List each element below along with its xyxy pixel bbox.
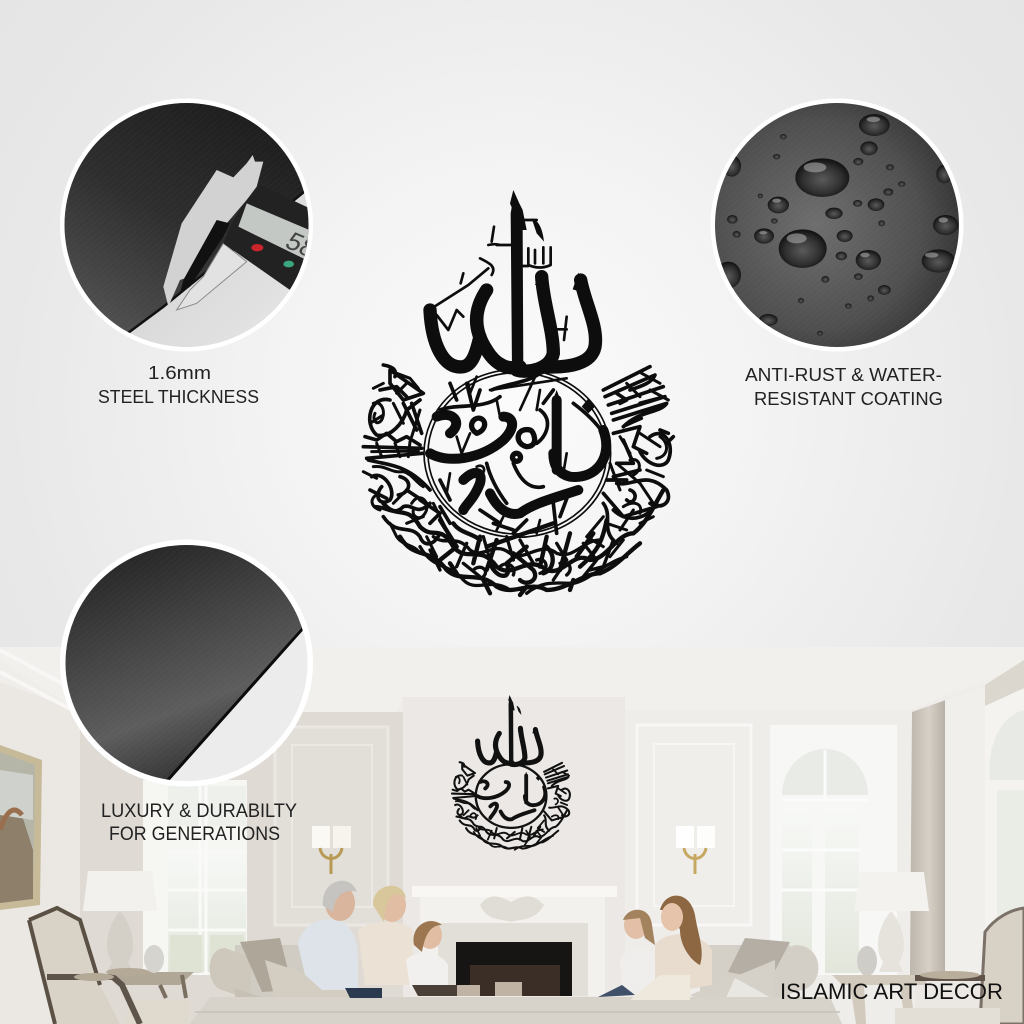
left window: [143, 780, 247, 975]
armchair left: [29, 908, 188, 1024]
circle: water drops photo: [710, 98, 964, 352]
right wall: [625, 712, 915, 1024]
sofa arm right: [765, 945, 818, 1000]
curtains: [910, 660, 1024, 975]
lamp left: [83, 871, 157, 970]
right window: [770, 725, 897, 975]
ceiling: [0, 647, 1024, 1024]
side table right: [832, 975, 930, 1024]
fireplace: [412, 886, 617, 996]
label: anti-rust coating: ANTI-RUST & WATER-: [745, 364, 942, 385]
label: steel thickness: [98, 363, 259, 407]
left wall: [0, 682, 80, 1024]
girl: [406, 953, 448, 988]
LCD screen: [238, 203, 308, 258]
girl 2: [620, 949, 657, 990]
decorative objects on sofa: [457, 982, 522, 996]
family left: [298, 881, 458, 998]
thin ticks and connecting lines: [432, 220, 567, 533]
family right: [598, 896, 712, 1000]
circle: brushed steel sheet photo: [60, 540, 315, 790]
central alif and tips: [510, 190, 527, 370]
water droplets: [716, 114, 958, 336]
green button: [283, 261, 294, 267]
label: anti-rust coating: RESISTANT COATING: [754, 388, 943, 409]
sofa arm left: [210, 948, 252, 1000]
painting: [0, 745, 42, 910]
armchair right: [895, 908, 1024, 1024]
circle: steel thickness caliper photo: [60, 98, 323, 352]
panel moulding left: [275, 727, 388, 925]
red button: [251, 244, 263, 251]
black brushed steel sheet: [60, 100, 315, 333]
caliper upper jaw: [163, 155, 263, 307]
label: luxury and durability: LUXURY & DURABILTY: [101, 801, 297, 822]
large top strokes: [430, 277, 596, 371]
lamp right: [854, 872, 929, 976]
inner circle strokes: [430, 400, 606, 514]
sofa base: [190, 997, 842, 1024]
woman 2: [655, 934, 712, 995]
woman: [358, 922, 413, 985]
sconce left: [312, 826, 351, 874]
LCD reading: 58: [280, 226, 323, 263]
living room scene: [0, 647, 1024, 1024]
small calligraphy on wall: [452, 695, 570, 850]
side table left: [110, 945, 194, 998]
label: luxury and durability: [101, 801, 297, 845]
sofa: [190, 938, 842, 1024]
double circle frame: [424, 369, 611, 537]
sofa back sections: [235, 945, 305, 1000]
label: brand: ISLAMIC ART DECOR: [780, 979, 1003, 1004]
outer filigree crescent: [363, 365, 450, 544]
left recess wall: [80, 712, 403, 1024]
jaw gap: [180, 220, 230, 293]
sconce right: [676, 826, 715, 874]
droplet highlights: [759, 117, 948, 258]
man: [298, 919, 358, 990]
caliper body: [223, 190, 308, 290]
label: anti-rust coating: [745, 364, 943, 409]
background: [0, 0, 1024, 648]
chimney breast: [403, 697, 625, 1024]
label: steel thickness: STEEL THICKNESS: [98, 386, 259, 407]
brushed steel sheet: [60, 540, 315, 781]
cushions right: [728, 938, 790, 980]
inner circle details: [472, 418, 535, 461]
caliper lower jaw: [177, 243, 247, 310]
caliper: [163, 155, 323, 310]
label: steel thickness: 1.6mm: [148, 363, 211, 383]
surface beneath sheet: [60, 100, 315, 350]
cushions left: [240, 938, 293, 992]
label: luxury and durability: FOR GENERATIONS: [109, 824, 280, 845]
main calligraphy artwork: [363, 190, 673, 595]
